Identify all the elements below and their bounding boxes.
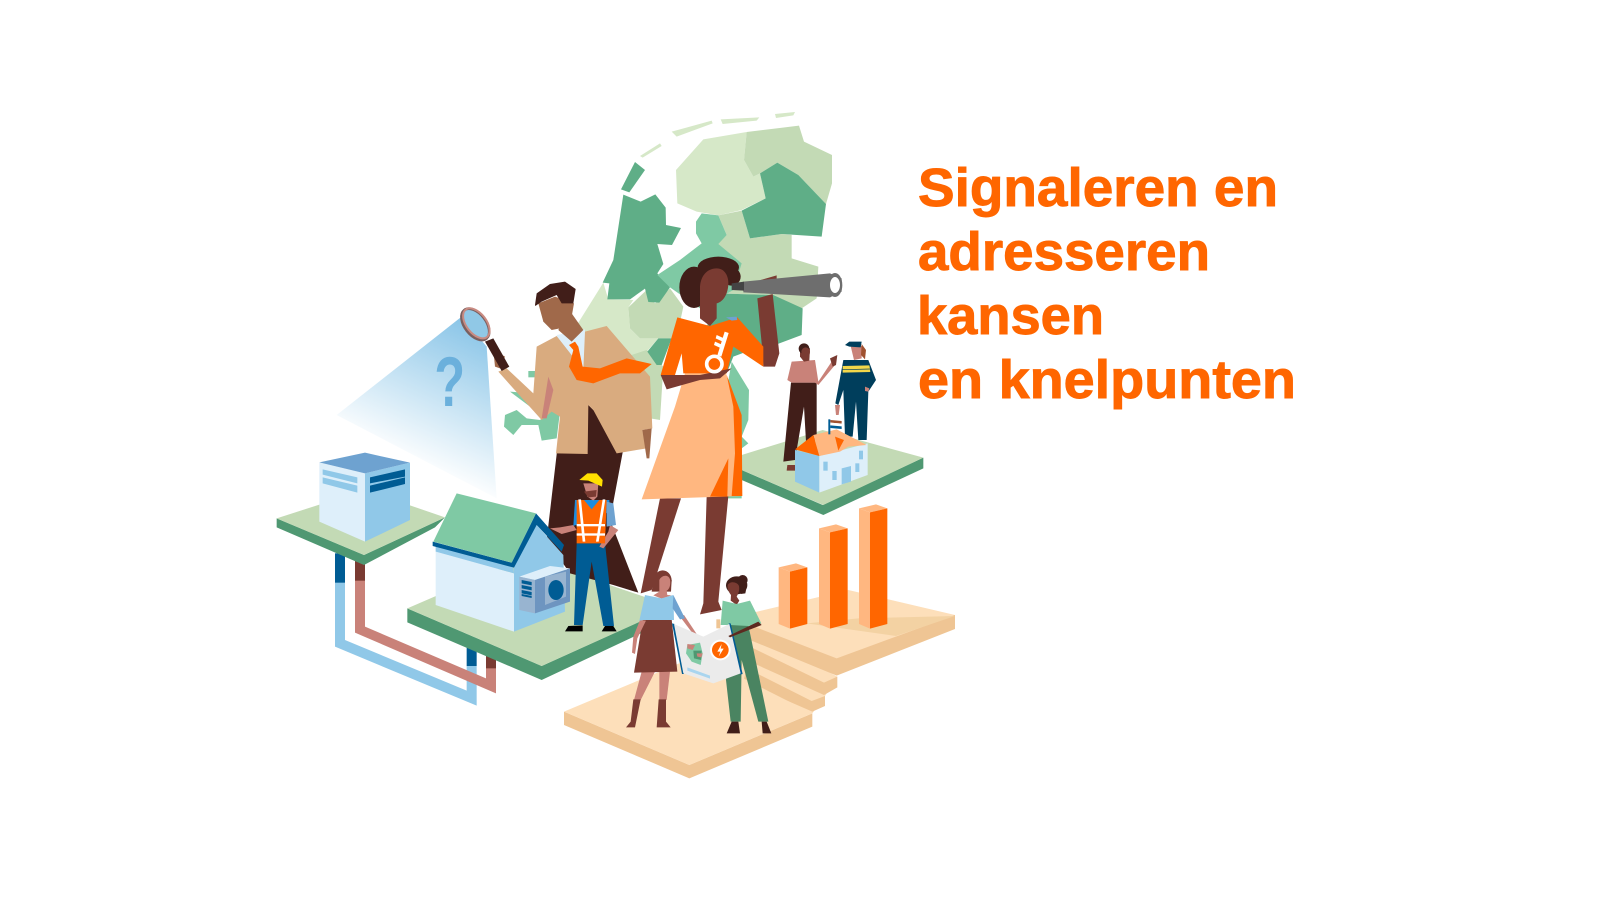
document with map and energy icon	[672, 622, 762, 683]
shoes	[727, 722, 771, 733]
house	[433, 493, 570, 632]
platform: town hall	[742, 342, 923, 515]
telescope	[732, 273, 842, 297]
raised arm	[757, 294, 779, 367]
map: Zuid-Holland region	[550, 283, 658, 367]
icon: energy bolt badge	[710, 640, 731, 660]
skirt	[634, 619, 677, 673]
person: man with magnifying glass	[456, 282, 652, 458]
face and neck	[728, 582, 739, 605]
question mark: ?	[434, 342, 465, 421]
hair	[535, 282, 576, 306]
hair	[726, 575, 748, 594]
legs	[626, 672, 671, 727]
person: woman in green	[721, 575, 771, 733]
person: woman talking	[783, 343, 837, 471]
top	[639, 595, 674, 621]
title: Signaleren en	[918, 158, 1278, 218]
platform: storage box	[277, 453, 445, 565]
face	[538, 297, 574, 330]
map: Groningen	[744, 126, 832, 204]
hand on telescope	[761, 275, 777, 287]
hair	[652, 570, 672, 592]
town hall building	[795, 419, 868, 493]
map: small southern patch	[647, 338, 672, 365]
trousers	[726, 625, 768, 722]
bar chart	[779, 504, 887, 629]
bar 2	[819, 524, 848, 629]
forearm	[728, 622, 762, 637]
title: en knelpunten	[918, 350, 1296, 410]
map: Brabant	[597, 350, 663, 420]
shirt	[557, 329, 585, 407]
man's trousers	[547, 405, 638, 593]
map: Flevoland and Utrecht	[657, 213, 742, 308]
platform: house	[407, 405, 673, 680]
icon: key	[707, 332, 729, 372]
map: Gelderland east	[700, 293, 803, 373]
skirt	[642, 373, 742, 499]
page edges	[672, 623, 743, 675]
pipes between platforms	[335, 553, 496, 706]
top	[721, 601, 761, 626]
magnifying glass	[456, 304, 509, 371]
stairs	[743, 647, 837, 712]
map of the Netherlands	[504, 112, 832, 498]
pipe ends: dark segments	[335, 553, 496, 668]
shoulder accent	[726, 317, 737, 321]
title: kansen	[917, 286, 1104, 346]
skirt pleat	[710, 375, 742, 497]
bar 1	[779, 563, 807, 629]
map: central light region	[628, 288, 683, 338]
map: Limburg	[727, 362, 749, 498]
arms	[632, 615, 701, 654]
heat pump unit	[519, 566, 570, 613]
upper tan platform	[716, 590, 955, 676]
hand right	[642, 428, 652, 458]
person: police officer	[835, 342, 876, 440]
bar 3	[859, 504, 887, 629]
face and neck	[700, 268, 728, 326]
face and neck	[653, 576, 672, 599]
pipe: warm	[355, 562, 496, 693]
title: adresseren	[918, 222, 1210, 282]
storage box	[319, 453, 410, 542]
lower tan platform	[564, 662, 812, 778]
person: woman with document	[626, 570, 701, 727]
platform: bar chart and stairs	[564, 504, 955, 778]
flag	[828, 419, 842, 434]
map: Texel	[621, 162, 645, 192]
pipe: cold	[335, 553, 477, 706]
jacket inner lining	[542, 377, 553, 418]
person: woman with telescope	[641, 257, 842, 614]
stairs backing	[727, 627, 837, 713]
legs	[641, 496, 728, 614]
map: Drenthe	[742, 163, 826, 238]
neck	[558, 313, 583, 342]
jacket	[498, 326, 652, 454]
map: Zeeland	[504, 371, 560, 441]
dress top	[661, 317, 763, 375]
title	[917, 158, 1296, 410]
tie	[569, 342, 652, 383]
map: Wadden islands	[640, 112, 795, 158]
forearm	[661, 368, 732, 389]
map: Overijssel and Gelderland	[717, 211, 818, 308]
map: Noord-Holland	[603, 194, 681, 303]
mini map	[686, 643, 703, 665]
person: construction worker	[550, 473, 618, 631]
sleeve	[673, 595, 685, 619]
document caption bar	[687, 667, 710, 679]
light beam with question mark	[337, 317, 497, 498]
hair	[679, 257, 741, 308]
map: Friesland	[676, 132, 766, 215]
